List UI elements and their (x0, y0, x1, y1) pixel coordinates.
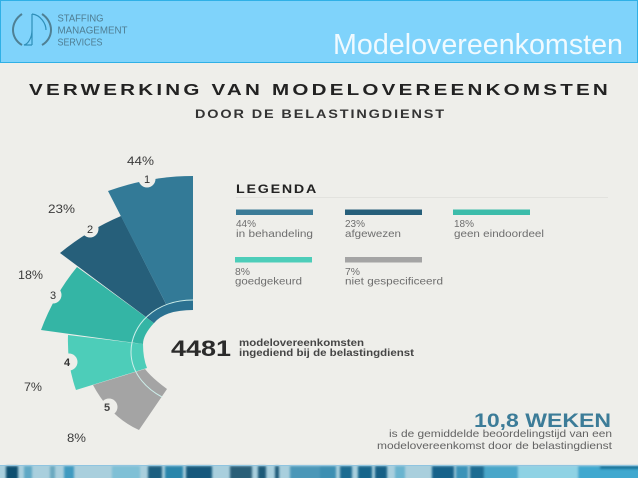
legend item: niet gespecificeerd: 7% (345, 266, 360, 278)
total description (239, 337, 415, 359)
percentage labels: 7% (24, 382, 42, 394)
header band (0, 0, 638, 62)
legend item: goedgekeurd (235, 257, 312, 288)
legend item: afgewezen: 23% (345, 218, 365, 230)
inner white ring (131, 300, 193, 397)
logo text: MANAGEMENT (58, 24, 128, 36)
infographic subheading: DOOR DE BELASTINGDIENST (195, 109, 446, 121)
callout description (377, 428, 612, 452)
inner ring shade (147, 300, 193, 323)
legend item: geen eindoordeel: geen eindoordeel (454, 228, 544, 240)
percentage labels: 8% (67, 433, 86, 445)
numbered marker 1 (138, 170, 156, 188)
slice 4: light teal (68, 335, 147, 390)
callout description: modelovereenkomst door de belastingdienst (377, 440, 612, 452)
callout: average review time: 10,8 WEKEN (474, 410, 611, 432)
percentage labels: 23% (48, 204, 75, 216)
legend item: geen eindoordeel: 18% (454, 218, 474, 230)
numbered marker 1: 1 (144, 174, 150, 186)
numbered marker 3 (44, 286, 62, 304)
segmented fan chart (41, 170, 193, 430)
slice 5: grey (93, 369, 167, 430)
bottom photo strip (0, 465, 638, 478)
legend item: goedgekeurd: goedgekeurd (235, 276, 302, 288)
infographic heading: VERWERKING VAN MODELOVEREENKOMSTEN (29, 82, 611, 99)
legend item: in behandeling: in behandeling (236, 228, 313, 240)
numbered marker 4 (60, 354, 78, 370)
legend (235, 182, 608, 288)
legend item: niet gespecificeerd (345, 257, 443, 288)
total description: ingediend bij de belastingdienst (239, 347, 415, 359)
slice 3: teal (41, 267, 154, 344)
slice 2: dark blue (60, 216, 169, 323)
legend item: afgewezen: afgewezen (345, 228, 401, 240)
slide title: Modelovereenkomsten (333, 29, 623, 61)
total count: 4481 (171, 336, 231, 361)
logo text (58, 12, 128, 48)
legend item: goedgekeurd: 8% (235, 266, 250, 278)
numbered marker 2: 2 (87, 224, 93, 236)
numbered marker 2 (82, 220, 98, 238)
callout: average review time (377, 410, 612, 452)
legend item: geen eindoordeel (453, 210, 544, 240)
numbered marker 3: 3 (50, 290, 56, 302)
legend item: in behandeling (236, 210, 313, 240)
legend item: afgewezen (345, 210, 422, 240)
numbered marker 4: 4 (64, 357, 71, 369)
percentage labels: 18% (18, 270, 43, 282)
numbered marker 5: 5 (104, 402, 110, 414)
slice 1: blue (108, 176, 193, 310)
numbered marker 5 (100, 398, 118, 416)
logo text: SERVICES (58, 36, 102, 48)
legend item: niet gespecificeerd: niet gespecificeerd (345, 276, 443, 288)
legend heading: LEGENDA (236, 182, 318, 196)
logo text: STAFFING (58, 12, 104, 24)
total description: modelovereenkomsten (239, 337, 364, 349)
percentage labels (18, 156, 154, 445)
percentage labels: 44% (127, 156, 154, 168)
icon: company logo (13, 14, 51, 45)
legend item: in behandeling: 44% (236, 218, 256, 230)
callout description: is de gemiddelde beoordelingstijd van een (389, 428, 612, 440)
